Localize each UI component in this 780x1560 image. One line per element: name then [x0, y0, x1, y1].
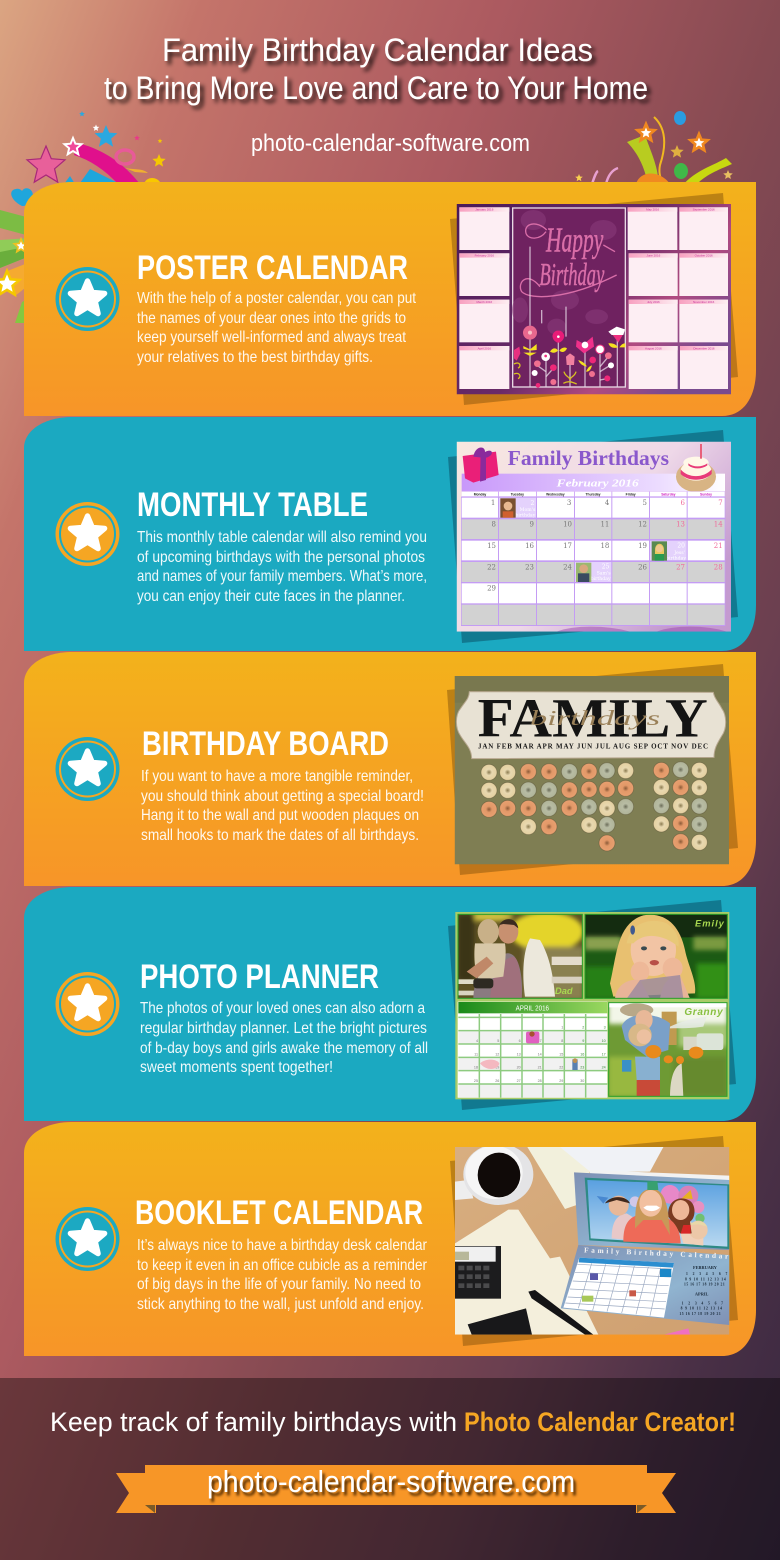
- small months: 8 9 10 11 12 13 14: [681, 1307, 722, 1311]
- body text: and names of your family members. What’s more,: [137, 568, 427, 585]
- planner calendar: 25: [474, 1079, 478, 1083]
- image: booklet desk calendar: [455, 1144, 729, 1335]
- planner calendar: 20: [517, 1066, 521, 1070]
- small months: 15 16 17 18 19 20 21: [684, 1282, 725, 1286]
- image: monthly birthday calendar: Sunday: [700, 493, 712, 497]
- image: monthly birthday calendar: 28: [714, 563, 723, 571]
- small months: 1 2 3 4 5 6 7: [686, 1272, 728, 1276]
- birthday captions: Sam's: [597, 570, 611, 576]
- photo: granny: [608, 1002, 727, 1097]
- cake: [676, 444, 716, 492]
- planner calendar: 1: [561, 1026, 563, 1030]
- date numbers: 11: [600, 521, 609, 529]
- planner calendar: 17: [602, 1052, 606, 1056]
- image: monthly birthday calendar: [457, 442, 731, 632]
- date grid: [461, 497, 725, 626]
- planner calendar: 7: [540, 1039, 542, 1043]
- title: [104, 32, 648, 106]
- birthday captions: birthday: [666, 556, 686, 562]
- planner calendar: 12: [495, 1052, 499, 1056]
- footer call to action: Keep track of family birthdays with: [50, 1407, 457, 1437]
- footer call to action: [50, 1407, 736, 1437]
- image: monthly birthday calendar: Friday: [626, 493, 636, 497]
- happy birthday lettering: [539, 221, 605, 292]
- date numbers: 10: [563, 521, 572, 529]
- image: monthly birthday calendar: 21: [714, 542, 723, 550]
- image shadow: [448, 430, 738, 643]
- date numbers: 16: [525, 542, 534, 550]
- planner calendar: 11: [474, 1052, 478, 1056]
- poster centre: [513, 208, 625, 387]
- title: Family Birthday Calendar Ideas: [162, 32, 593, 68]
- pen: [528, 1290, 593, 1335]
- planner calendar: 14: [538, 1052, 542, 1056]
- body text: sweet moments spent together!: [140, 1059, 333, 1076]
- image: poster calendar: [457, 204, 731, 394]
- photo: emily: [585, 914, 728, 999]
- body text: If you want to have a more tangible reminder,: [141, 768, 413, 785]
- image: monthly birthday calendar: Tuesday: [511, 493, 524, 497]
- date numbers: 15: [487, 542, 496, 550]
- image: monthly birthday calendar: 6: [681, 499, 685, 507]
- image shadow: [450, 1136, 738, 1346]
- image: booklet desk calendar: Family Birthday Calendar: [584, 1245, 729, 1261]
- date numbers: 1: [491, 499, 495, 507]
- papers: [527, 1147, 663, 1209]
- decoration: left party burst: [0, 111, 166, 323]
- booklet back page: [590, 1172, 730, 1181]
- image shadow: [447, 664, 738, 875]
- image: monthly birthday calendar: February 2016: [555, 479, 640, 490]
- date numbers: 29: [487, 585, 496, 593]
- flowers: [514, 326, 625, 388]
- panel: booklet calendar: [24, 1122, 756, 1356]
- planner calendar: 28: [538, 1079, 542, 1083]
- wooden plaque: [456, 692, 726, 759]
- planner calendar: 15: [559, 1052, 563, 1056]
- body text: small hooks to mark the dates of all birthdays.: [141, 827, 419, 844]
- photo: granny: Granny: [684, 1007, 723, 1018]
- month cards: [459, 207, 728, 389]
- image: family birthday board: [455, 676, 729, 864]
- icon: star badge: [56, 267, 120, 331]
- image: photo planner: [455, 912, 729, 1099]
- website address: photo-calendar-software.com: [251, 130, 530, 157]
- date numbers: [487, 499, 647, 593]
- birthday captions: birthday: [591, 576, 611, 582]
- body text: The photos of your loved ones can also adorn a: [140, 1000, 425, 1017]
- planner calendar: 5: [497, 1039, 499, 1043]
- image: monthly birthday calendar: Monday: [474, 493, 486, 497]
- date numbers: 23: [525, 563, 534, 571]
- image: monthly birthday calendar: 14: [714, 521, 723, 529]
- image: poster calendar: December 2016: [693, 346, 715, 350]
- panel background: [24, 1122, 756, 1356]
- birthday captions: 20: [677, 543, 685, 550]
- booklet top cover: [574, 1172, 729, 1250]
- booklet photo: [585, 1178, 729, 1249]
- planner calendar: 9: [582, 1039, 584, 1043]
- date numbers: 22: [487, 563, 496, 571]
- date numbers: 4: [605, 499, 610, 507]
- body text: This monthly table calendar will also remind you: [137, 529, 427, 546]
- footer call to action: Photo Calendar Creator!: [464, 1407, 736, 1437]
- body text: It’s always nice to have a birthday desk calendar: [137, 1237, 428, 1254]
- image: monthly birthday calendar: Saturday: [661, 493, 676, 497]
- ribbon banner: [116, 1464, 676, 1513]
- body text: you can enjoy their cute faces in the planner.: [137, 588, 405, 605]
- date numbers: 3: [567, 499, 571, 507]
- body text: the names of your dear ones into the grids to: [137, 310, 406, 327]
- month band: [462, 474, 725, 491]
- birthday captions: birthday: [515, 513, 536, 519]
- image: monthly birthday calendar: 13: [676, 521, 685, 529]
- image: poster calendar: February 2016: [475, 254, 494, 258]
- panel: poster calendar: [24, 182, 756, 416]
- image: monthly birthday calendar: 7: [718, 499, 723, 507]
- body text: With the help of a poster calendar, you can put: [137, 290, 416, 307]
- image: poster calendar: September 2016: [693, 208, 715, 212]
- image: poster calendar: April 2016: [478, 346, 491, 350]
- decoration: right party burst: [575, 111, 733, 186]
- panel background: [24, 417, 756, 651]
- panel: photo planner: [24, 887, 756, 1121]
- body text: [141, 768, 424, 844]
- icon: star badge: [56, 737, 120, 801]
- body text: of b-day boys and girls awake the memory of all: [140, 1040, 428, 1057]
- flower stems: [530, 247, 617, 387]
- weekday header row: [462, 491, 725, 498]
- body text: [137, 290, 416, 366]
- body text: you should think about getting a special board!: [141, 788, 424, 805]
- planner calendar: 18: [474, 1066, 478, 1070]
- body text: your relatives to the best birthday gifts.: [137, 349, 373, 366]
- body text: stick anything to the wall, just unfold and enjoy.: [137, 1296, 424, 1313]
- birthday captions: 25: [602, 564, 610, 571]
- image: monthly birthday calendar: Wednesday: [546, 493, 565, 497]
- heading: MONTHLY TABLE: [137, 486, 368, 524]
- date numbers: 17: [563, 542, 572, 550]
- happy birthday lettering: Birthday: [539, 256, 605, 292]
- image shadow: [450, 193, 738, 405]
- small months: FEBRUARY: [693, 1265, 718, 1270]
- planner calendar: 24: [602, 1066, 606, 1070]
- folder: [455, 1210, 598, 1335]
- planner calendar: 2: [582, 1026, 584, 1030]
- body text: [137, 529, 427, 605]
- planner calendar: 27: [517, 1079, 521, 1083]
- gift box: [463, 448, 499, 483]
- planner calendar: [458, 1002, 607, 1098]
- birthday captions: Jess': [673, 550, 685, 556]
- image: poster calendar: March 2016: [476, 300, 493, 304]
- planner calendar: 22: [559, 1066, 563, 1070]
- planner calendar: 6: [519, 1039, 521, 1043]
- planner calendar: APRIL 2016: [516, 1003, 549, 1012]
- image: poster calendar: November 2016: [693, 300, 715, 304]
- portrait: mom: [500, 498, 516, 518]
- heading: BOOKLET CALENDAR: [135, 1194, 423, 1232]
- hanging discs: [481, 762, 707, 851]
- date numbers: 24: [563, 563, 573, 571]
- photo: emily: Emily: [695, 919, 725, 929]
- date numbers: 8: [492, 521, 496, 529]
- planner calendar: 26: [495, 1079, 499, 1083]
- planner calendar: 10: [602, 1039, 606, 1043]
- image: poster calendar: January 2016: [475, 208, 494, 212]
- panel: birthday board: [24, 652, 756, 886]
- body text: of big days in the life of your family. No need to: [137, 1276, 421, 1293]
- coffee cup: [455, 1144, 533, 1205]
- photo: dad and child: Dad: [555, 986, 573, 996]
- heading: POSTER CALENDAR: [137, 249, 408, 287]
- image shadow: [448, 900, 736, 1110]
- bottom dark band: [0, 1378, 780, 1560]
- icon: star badge: [56, 1207, 120, 1271]
- date numbers: 26: [638, 563, 647, 571]
- small months: 1 2 3 4 5 6 7: [682, 1301, 723, 1305]
- panel background: [24, 182, 756, 416]
- small months: [679, 1265, 728, 1316]
- photo frames: [458, 914, 727, 1096]
- date numbers: 19: [638, 542, 647, 550]
- birthday captions: Mom's: [520, 507, 536, 513]
- planner calendar: 23: [580, 1066, 584, 1070]
- planner calendar: 16: [580, 1052, 584, 1056]
- icon: star badge: [56, 972, 120, 1036]
- calculator: [455, 1246, 501, 1299]
- march grid: [563, 1258, 674, 1318]
- image: family birthday board: JAN FEB MAR APR MAY JUN JUL AUG SEP OCT NOV DEC: [478, 742, 708, 750]
- body text: regular birthday planner. Let the bright pictures: [140, 1020, 427, 1037]
- body text: to keep it even in an office cubicle as a reminder: [137, 1257, 428, 1274]
- heading: PHOTO PLANNER: [140, 958, 379, 996]
- planner calendar: 4: [476, 1039, 478, 1043]
- body text: [140, 1000, 428, 1076]
- image: family birthday board: FAMILY: [478, 688, 708, 749]
- planner calendar: 3: [604, 1026, 606, 1030]
- title: to Bring More Love and Care to Your Home: [104, 70, 648, 106]
- small months: 8 9 10 11 12 13 14: [685, 1277, 726, 1281]
- planner calendar: 21: [538, 1066, 542, 1070]
- portrait: sam: [576, 563, 591, 582]
- birthday captions: [515, 500, 686, 582]
- date numbers: 5: [643, 499, 647, 507]
- image: poster calendar: August 2016: [645, 346, 662, 350]
- happy birthday lettering: Happy: [545, 221, 604, 260]
- body text: Hang it to the wall and put wooden plaques on: [141, 807, 419, 824]
- booklet lower page: [561, 1245, 729, 1325]
- planner calendar: 30: [580, 1079, 584, 1083]
- birthday captions: 2: [531, 500, 535, 507]
- panel background: [24, 652, 756, 886]
- sticky note: [664, 1328, 690, 1335]
- planner calendar: 13: [517, 1052, 521, 1056]
- panel background: [24, 887, 756, 1121]
- date numbers: 12: [638, 521, 647, 529]
- portrait: jess: [652, 541, 667, 561]
- heading: BIRTHDAY BOARD: [142, 725, 389, 763]
- planner calendar: 19: [495, 1066, 499, 1070]
- ribbon website address: photo-calendar-software.com: [207, 1464, 575, 1499]
- panel: monthly table: [24, 417, 756, 651]
- small months: APRIL: [695, 1292, 709, 1297]
- body text: of upcoming birthdays with the personal photos: [137, 549, 425, 566]
- date numbers: 18: [600, 542, 609, 550]
- image: poster calendar: June 2016: [646, 254, 661, 258]
- body text: keep yourself well-informed and always treat: [137, 329, 406, 346]
- image: poster calendar: October 2016: [695, 254, 713, 258]
- image: monthly birthday calendar: Thursday: [586, 493, 601, 497]
- icon: star badge: [56, 502, 120, 566]
- body text: [137, 1237, 428, 1313]
- planner calendar: 29: [559, 1079, 563, 1083]
- planner calendar: 8: [561, 1039, 563, 1043]
- date numbers: 9: [530, 521, 534, 529]
- black notebook: [468, 1308, 532, 1335]
- image: poster calendar: July 2016: [647, 300, 660, 304]
- small months: 15 16 17 18 19 20 21: [679, 1312, 721, 1316]
- image: family birthday board: birthdays: [530, 708, 660, 730]
- image: monthly birthday calendar: 27: [676, 563, 685, 571]
- calendar title: Family Birthdays: [508, 446, 669, 470]
- photo: dad and child: [458, 912, 583, 1000]
- image: poster calendar: May 2016: [646, 208, 660, 212]
